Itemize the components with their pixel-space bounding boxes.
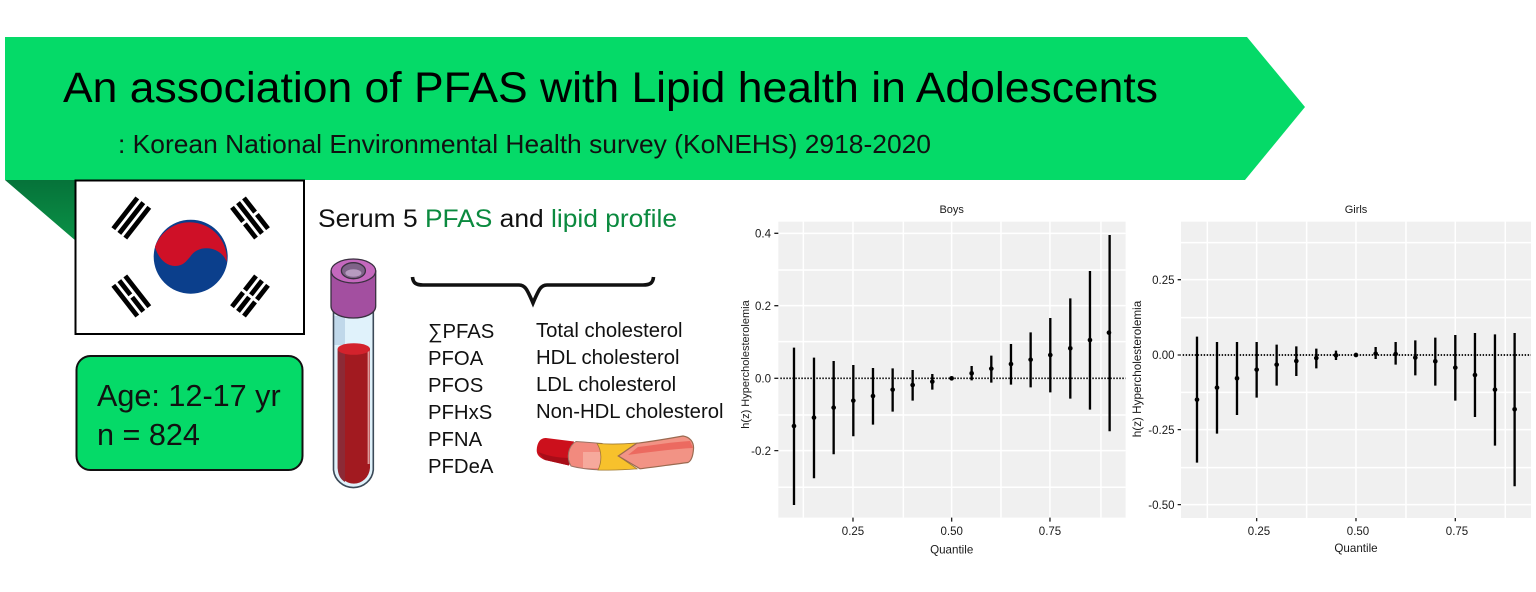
title: An association of PFAS with Lipid health in Adolescents	[63, 64, 1158, 112]
y tick labels: 0.0	[755, 374, 771, 386]
x tick labels: 0.25	[1248, 526, 1270, 538]
plot panel	[1178, 222, 1531, 521]
callout: age and sample size	[76, 356, 302, 470]
y tick labels	[1148, 275, 1174, 512]
text block: PFAS list: PFOA	[428, 348, 484, 370]
chart: Boys	[740, 204, 1126, 556]
x tick labels	[1248, 526, 1468, 538]
y tick labels: 0.4	[755, 228, 772, 240]
text block: PFAS list	[428, 321, 494, 478]
x axis title: Quantile	[930, 544, 973, 556]
plot panel	[774, 222, 1126, 522]
y tick labels: -0.50	[1148, 500, 1174, 512]
chart title: Girls	[1345, 204, 1368, 216]
text block: lipid list: Total cholesterol	[536, 320, 683, 342]
y tick labels	[751, 228, 772, 458]
x tick labels: 0.25	[842, 526, 864, 538]
banner fold	[5, 180, 76, 241]
subtitle: : Korean National Environmental Health survey (KoNEHS) 2918-2020	[118, 131, 931, 159]
text block: PFAS list: ∑PFAS	[428, 321, 494, 343]
x tick labels	[842, 526, 1061, 538]
y tick labels: 0.2	[755, 301, 771, 313]
x tick labels: 0.75	[1446, 526, 1468, 538]
chart: Girls	[1131, 204, 1531, 555]
text block: lipid list: LDL cholesterol	[536, 374, 676, 396]
y tick labels: -0.25	[1148, 425, 1174, 437]
text block: PFAS list: PFOS	[428, 375, 483, 397]
brace	[412, 277, 654, 303]
text block: lipid list	[536, 320, 724, 423]
y tick labels: 0.25	[1152, 275, 1174, 287]
chart title: Boys	[939, 204, 964, 216]
icon: blood tube	[331, 259, 376, 488]
y axis title: h(z) Hypercholesterolemia	[740, 299, 752, 429]
y tick labels: -0.2	[751, 446, 771, 458]
callout: age and sample size: Age: 12-17 yr	[97, 379, 281, 413]
text block: lipid list: Non-HDL cholesterol	[536, 401, 724, 423]
text block: PFAS list: PFHxS	[428, 402, 492, 424]
heading: serum PFAS and lipid profile: Serum 5 PFAS and lipid profile	[318, 205, 677, 233]
x tick labels: 0.50	[941, 526, 963, 538]
y tick labels: 0.00	[1152, 350, 1174, 362]
x axis title: Quantile	[1334, 542, 1378, 555]
x tick labels: 0.50	[1347, 526, 1369, 538]
text block: PFAS list: PFDeA	[428, 456, 494, 478]
callout: age and sample size: n = 824	[97, 418, 200, 452]
icon: Korean flag	[76, 180, 304, 334]
text block: PFAS list: PFNA	[428, 429, 483, 451]
x tick labels: 0.75	[1039, 526, 1061, 538]
y axis title: h(z) Hypercholesterolemia	[1131, 300, 1144, 437]
title banner	[5, 37, 1305, 241]
text block: lipid list: HDL cholesterol	[536, 347, 680, 369]
icon: artery with plaque	[537, 436, 694, 470]
